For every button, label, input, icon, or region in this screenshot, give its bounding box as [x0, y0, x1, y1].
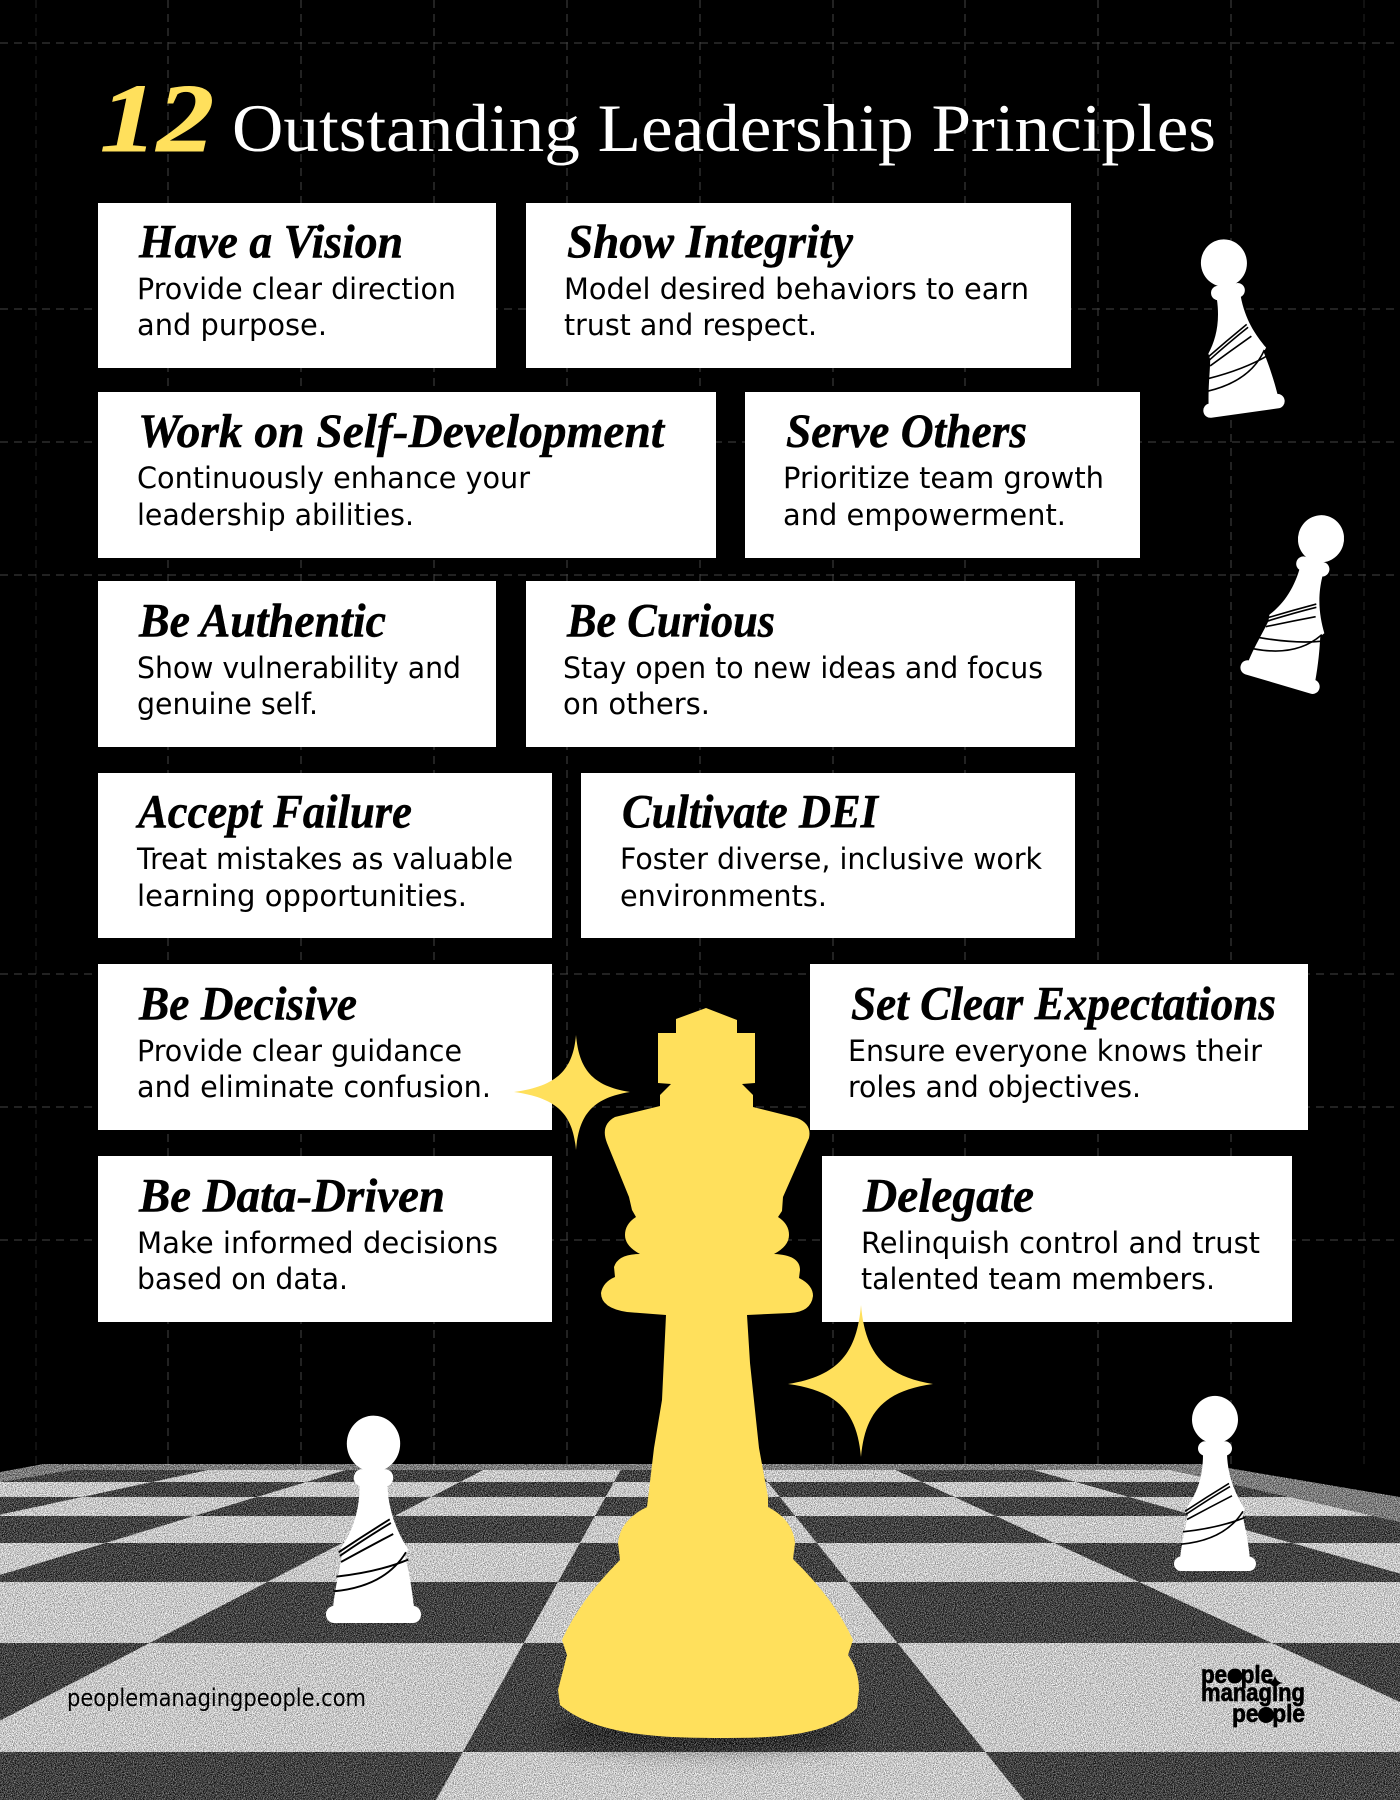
panel: Have a Vision: Provide clear direction: [137, 272, 456, 306]
panel: Be Curious: on others.: [563, 687, 710, 721]
title: 12: [100, 65, 214, 173]
icon: sparkle left: [514, 1035, 630, 1150]
panel: Accept Failure: Treat mistakes as valuable: [136, 842, 513, 876]
icon: pawn on board left: [326, 1416, 421, 1623]
website url: peoplemanagingpeople.com: [67, 1684, 366, 1712]
title: Outstanding Leadership Principles: [232, 90, 1216, 166]
panel: Serve Others: Serve Others: [786, 405, 1027, 458]
panel: Have a Vision: [98, 203, 496, 368]
panel: Be Data-Driven: Be Data-Driven: [138, 1170, 445, 1222]
chess board floor: [0, 1464, 1400, 1800]
panel: Cultivate DEI: Foster diverse, inclusive work: [620, 842, 1042, 876]
panel: Be Authentic: Show vulnerability and: [137, 651, 461, 685]
panel: Be Decisive: Provide clear guidance: [137, 1034, 462, 1068]
panel: Work on Self-Development: Work on Self-Development: [138, 405, 666, 458]
panel: Have a Vision: and purpose.: [137, 308, 327, 342]
panel: Cultivate DEI: environments.: [620, 879, 827, 913]
panel: Serve Others: Prioritize team growth: [783, 461, 1104, 495]
icon: pawn top right: [1180, 234, 1286, 419]
panel: Work on Self-Development: [98, 392, 716, 558]
logo: people managing people: people: [1232, 1700, 1305, 1728]
icon: pawn middle right: [1239, 504, 1367, 696]
panel: Cultivate DEI: [581, 773, 1075, 938]
panel: Accept Failure: [98, 773, 552, 938]
panel: Be Decisive: Be Decisive: [138, 978, 357, 1030]
panel: Show Integrity: Model desired behaviors to earn: [564, 272, 1029, 306]
panel: Be Curious: [526, 581, 1075, 747]
panel: Be Curious: Stay open to new ideas and focus: [563, 651, 1043, 685]
panel: Delegate: Relinquish control and trust: [861, 1226, 1260, 1260]
logo: people managing people: people: [1201, 1661, 1273, 1689]
icon: yellow king chess piece: [558, 1008, 859, 1738]
panel: Show Integrity: [526, 203, 1071, 368]
panel: Cultivate DEI: Cultivate DEI: [622, 786, 880, 838]
panel: Delegate: [822, 1156, 1292, 1322]
panel: Be Curious: Be Curious: [566, 594, 775, 648]
panel: Set Clear Expectations: [810, 964, 1308, 1130]
icon: sparkle right: [788, 1305, 933, 1457]
panel: Set Clear Expectations: roles and objectives.: [848, 1070, 1141, 1104]
panel: Be Authentic: genuine self.: [137, 687, 318, 721]
panel: Delegate: Delegate: [862, 1170, 1034, 1222]
panel: Be Decisive: and eliminate confusion.: [137, 1070, 491, 1104]
panel: Accept Failure: learning opportunities.: [137, 879, 467, 913]
icon: pawn on board right: [1174, 1396, 1256, 1571]
panel: Serve Others: and empowerment.: [783, 498, 1066, 532]
panel: Be Authentic: [98, 581, 496, 747]
panel: Work on Self-Development: Continuously enhance your: [137, 461, 530, 495]
panel: Set Clear Expectations: Ensure everyone knows their: [848, 1034, 1262, 1068]
panel: Set Clear Expectations: Set Clear Expectations: [851, 978, 1276, 1030]
panel: Have a Vision: Have a Vision: [138, 216, 403, 268]
panel: Work on Self-Development: leadership abilities.: [137, 498, 414, 532]
title: [100, 65, 1216, 173]
panel: Be Data-Driven: based on data.: [137, 1262, 348, 1296]
panel: Be Decisive: [98, 964, 552, 1130]
panel: Be Data-Driven: [98, 1156, 552, 1322]
logo: people managing people: managing: [1201, 1679, 1305, 1707]
panel: Be Data-Driven: Make informed decisions: [137, 1226, 498, 1260]
panel: Show Integrity: Show Integrity: [567, 216, 854, 268]
panel: Accept Failure: Accept Failure: [135, 786, 412, 838]
logo: people managing people: [1201, 1661, 1305, 1728]
panel: Delegate: talented team members.: [861, 1262, 1215, 1296]
panel: Be Authentic: Be Authentic: [138, 594, 386, 648]
panel: Show Integrity: trust and respect.: [564, 308, 817, 342]
panel: Serve Others: [745, 392, 1140, 558]
